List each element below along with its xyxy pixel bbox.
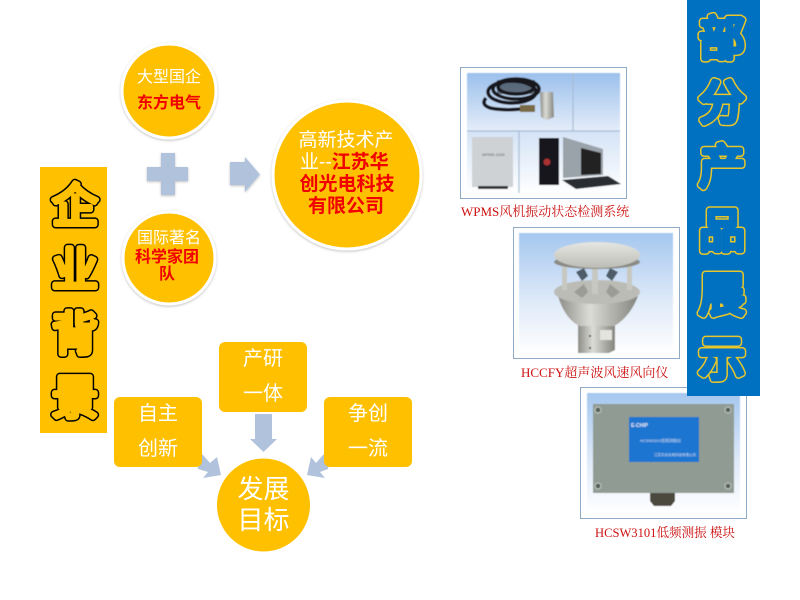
panel: partial product showcase title: 分	[699, 77, 745, 129]
circle: development goal	[217, 458, 310, 552]
circle: high-tech company	[273, 101, 421, 249]
product image: ultrasonic anemometer	[514, 228, 680, 358]
box: strive for first class	[324, 397, 412, 467]
caption: HCCFY: HCCFY超声波风速风向仪	[521, 365, 668, 380]
panel: partial product showcase title: 展	[699, 269, 745, 321]
circle: state enterprise	[122, 44, 216, 138]
box: independent innovation: 创新	[138, 437, 178, 460]
panel: enterprise background title: 企	[52, 180, 98, 232]
box: industry research integration	[219, 342, 307, 412]
panel: partial product showcase title: 示	[699, 333, 745, 385]
circle: state enterprise: 东方电气	[137, 93, 201, 112]
box: strive for first class: 争创	[348, 402, 388, 425]
box: industry research integration: 一体	[243, 382, 283, 405]
arrow: right	[230, 157, 260, 192]
product image: vibration module: HCSW3101低频测振仪	[640, 437, 681, 443]
panel: enterprise background title: 景	[52, 372, 98, 424]
product image: WPMS system	[460, 68, 626, 198]
product image: vibration module: E-CHIP	[631, 423, 649, 429]
circle: development goal: 发展	[237, 474, 290, 504]
box: independent innovation	[114, 397, 202, 467]
circle: high-tech company: 高新技术产	[298, 129, 394, 151]
panel: enterprise background title: 背	[52, 308, 98, 360]
circle: high-tech company: 创光电科技	[299, 173, 395, 195]
icon: plus	[147, 153, 188, 195]
arrow: left diagonal	[195, 450, 221, 478]
box: independent innovation: 自主	[138, 402, 178, 425]
panel: partial product showcase title: 部	[699, 13, 745, 65]
circle: scientist team: 队	[159, 265, 175, 283]
panel: enterprise background title: 企	[52, 180, 98, 232]
product image: vibration module	[580, 388, 746, 518]
circle: development goal: 目标	[237, 505, 290, 535]
circle: high-tech company: 业--江苏华	[300, 151, 389, 173]
panel: partial product showcase title: 示	[699, 333, 745, 385]
arrow: down	[250, 414, 277, 452]
panel: enterprise background title: 业	[52, 244, 98, 296]
panel: partial product showcase title: 品	[699, 205, 745, 257]
panel: enterprise background title	[40, 167, 107, 433]
panel: partial product showcase title: 部	[699, 13, 745, 65]
arrow: right diagonal	[307, 450, 331, 478]
panel: enterprise background title: 景	[52, 372, 98, 424]
panel: partial product showcase title: 品	[699, 205, 745, 257]
circle: scientist team: 科学家团	[135, 247, 199, 266]
panel: enterprise background title: 业	[52, 244, 98, 296]
caption: WPMS: WPMS风机振动状态检测系统	[461, 204, 629, 219]
panel: partial product showcase title: 产	[699, 141, 745, 193]
product image: vibration module: 江苏华创光电科技有限公司	[654, 452, 696, 457]
caption: HCSW3101: HCSW3101低频测振 模块	[595, 525, 735, 540]
box: strive for first class: 一流	[348, 437, 388, 460]
box: industry research integration: 产研	[243, 347, 283, 370]
panel: partial product showcase title: 产	[699, 141, 745, 193]
circle: scientist team	[123, 212, 215, 304]
panel: partial product showcase title: 展	[699, 269, 745, 321]
product image: WPMS system: WPMS-1000	[482, 152, 505, 157]
panel: partial product showcase title	[687, 0, 760, 396]
panel: enterprise background title: 背	[52, 308, 98, 360]
panel: partial product showcase title: 分	[699, 77, 745, 129]
circle: scientist team: 国际著名	[137, 229, 201, 247]
circle: high-tech company: 有限公司	[308, 195, 384, 217]
circle: state enterprise: 大型国企	[137, 68, 201, 86]
